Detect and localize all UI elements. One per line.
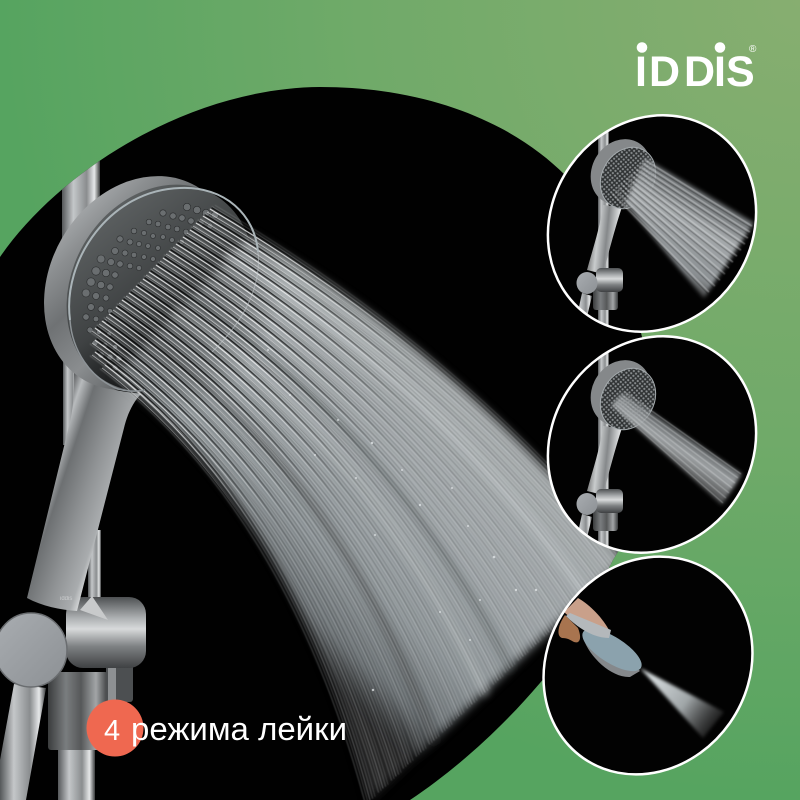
shower hose: [0, 684, 46, 800]
caption text: режима лейки: [131, 711, 347, 747]
circle 1 backdrop: [566, 116, 755, 330]
hand: [558, 598, 610, 642]
water droplets: [267, 349, 537, 691]
slide rail: [58, 160, 101, 800]
panel background: [0, 87, 642, 800]
circle 1 fixture: [576, 132, 623, 325]
circle 2 shower head: [590, 360, 656, 430]
circle 3 border: [501, 516, 795, 800]
bright jets close to the head: [92, 207, 408, 526]
large black photo panel: [0, 87, 642, 800]
circle 2 border: [506, 295, 798, 594]
shower head: [44, 176, 251, 390]
circle 1 spray: [611, 158, 754, 298]
holder bracket: [48, 596, 146, 750]
circle 2 backdrop: [550, 338, 755, 552]
head face plate: [66, 184, 251, 390]
shower handle: [27, 373, 140, 611]
mode circle 2: narrow jet: [546, 335, 758, 554]
light water streaks: [90, 206, 630, 800]
mist cone: [640, 668, 724, 738]
circle 2 photo: [550, 338, 755, 552]
logo: IDDIS: [635, 42, 757, 96]
circle 2 fixture: [576, 352, 623, 546]
spray body: [115, 235, 625, 800]
circle 1 shower head: [590, 139, 656, 210]
transparent head rim: [69, 188, 258, 391]
nozzles: [82, 203, 219, 371]
coral circle: [86, 700, 144, 756]
caption badge: [86, 700, 347, 756]
circle 1 photo: [566, 116, 755, 330]
circle 3 backdrop: [544, 558, 752, 774]
circle 1 border: [506, 74, 798, 373]
main water spray: [90, 206, 630, 800]
holder end cap: [0, 613, 67, 687]
caption text: 4: [104, 715, 120, 747]
circle 3 photo: [544, 558, 752, 774]
logo dots: [637, 42, 725, 53]
registered mark: ®: [749, 44, 757, 55]
broad soft bands in the water: [149, 256, 587, 740]
logo wordmark: IDDIS: [635, 48, 755, 96]
dark gaps between streaks: [92, 206, 610, 714]
mode circle 3: mist: [542, 555, 754, 776]
circle 2 spray: [612, 392, 742, 505]
head side view: [566, 613, 648, 679]
shower handle: iddis: [60, 596, 72, 602]
mode circle 1: wide spray: [546, 114, 758, 333]
head housing: [44, 176, 199, 390]
